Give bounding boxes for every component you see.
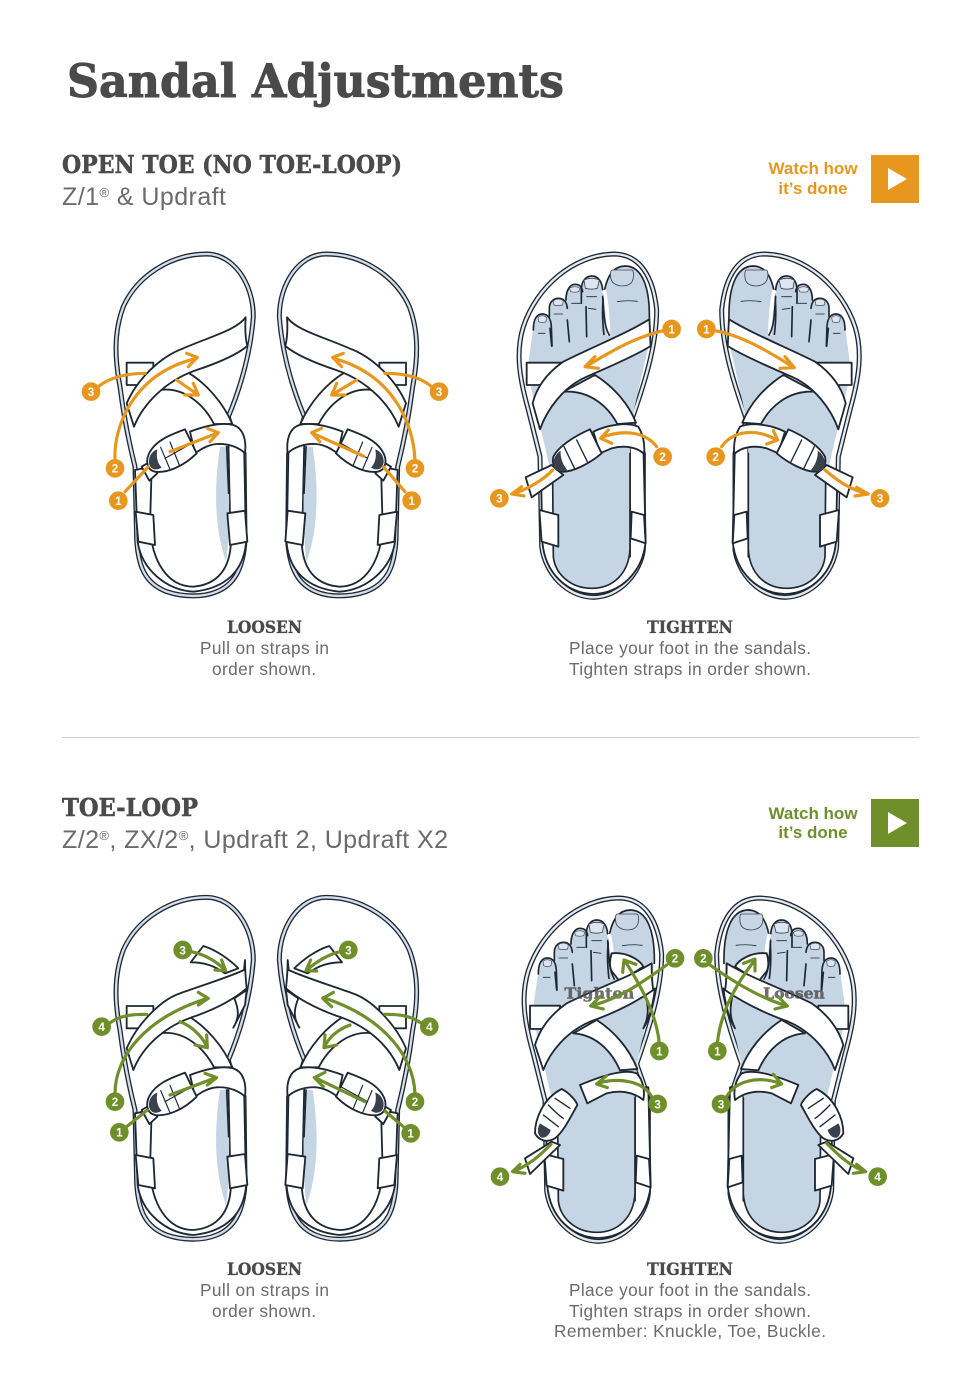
subheading: toe-loop models: ® — [99, 828, 109, 843]
arrows: left sandal: 3 — [179, 944, 186, 957]
caption: toe-loop loosen: LOOSEN — [227, 1260, 302, 1279]
arrows: right sandal: 1 — [408, 495, 415, 508]
arrows: right sandal: 3 — [436, 386, 443, 399]
arrows: right sandal: 2 — [412, 1096, 419, 1109]
caption: open toe tighten — [569, 618, 811, 679]
arrows: left sandal: 3 — [88, 386, 95, 399]
arrows: left foot: 3 — [654, 1098, 661, 1111]
subheading: open toe models: ® — [99, 185, 109, 200]
arrows: left foot: 1 — [656, 1045, 663, 1058]
panel: toe-loop loosen — [92, 897, 439, 1239]
subheading: open toe models: & Updraft — [109, 183, 226, 211]
right sandal — [279, 254, 417, 596]
caption: toe-loop loosen: Pull on straps in — [200, 1280, 329, 1300]
subheading: toe-loop models: Z/2 — [62, 826, 99, 854]
arrows: right sandal: 2 — [412, 463, 419, 476]
right sandal — [279, 897, 417, 1239]
watch link: open toe — [768, 155, 919, 203]
arrows: left sandal: 2 — [112, 1096, 119, 1109]
panel: open toe tighten — [490, 254, 889, 597]
caption: open toe loosen: Pull on straps in — [200, 638, 329, 658]
watch link: toe-loop — [768, 799, 919, 847]
arrows: left sandal: 4 — [98, 1021, 105, 1034]
caption: toe-loop tighten: Tighten straps in order shown. — [569, 1301, 811, 1321]
arrows: right foot — [694, 949, 887, 1186]
subheading: toe-loop models: ® — [179, 828, 189, 843]
arrows: right foot: 4 — [874, 1171, 881, 1184]
arrows: left foot — [491, 949, 684, 1186]
arrows: right foot: 3 — [877, 493, 884, 506]
left sandal — [116, 254, 253, 596]
arrows: left foot: 2 — [659, 451, 666, 464]
arrows: right foot: 1 — [703, 323, 710, 336]
caption: toe-loop tighten: Place your foot in the sandals. — [569, 1280, 811, 1300]
caption: toe-loop tighten: Remember: Knuckle, Toe, Buckle. — [554, 1321, 826, 1341]
watch link: open toe: Watch how — [768, 159, 858, 178]
arrows: left foot — [490, 320, 681, 508]
arrows: right sandal — [312, 353, 448, 510]
left foot in sandal — [519, 254, 657, 597]
caption: open toe tighten: TIGHTEN — [647, 618, 733, 637]
right foot in sandal — [717, 898, 854, 1241]
panel: toe-loop tighten — [491, 898, 887, 1241]
subheading: toe-loop models: , ZX/2 — [109, 826, 178, 854]
arrows: right foot: 2 — [712, 451, 719, 464]
arrows: right foot — [697, 320, 889, 508]
heading: open toe: OPEN TOE (NO TOE-LOOP) — [62, 150, 402, 179]
watch link: open toe: it’s done — [778, 179, 848, 198]
right foot in sandal — [722, 254, 859, 597]
arrows: right sandal: 4 — [426, 1021, 433, 1034]
panel: open toe loosen — [82, 254, 448, 596]
heading: toe-loop: TOE-LOOP — [62, 793, 198, 822]
caption: open toe tighten: Tighten straps in order shown. — [569, 659, 811, 679]
arrows: right sandal: 3 — [345, 944, 352, 957]
arrows: left sandal: 1 — [116, 1127, 123, 1140]
arrows: left sandal: 2 — [112, 463, 119, 476]
arrows: left foot: 3 — [496, 493, 503, 506]
subheading: toe-loop models: , Updraft 2, Updraft X2 — [189, 826, 448, 854]
arrows: right sandal: 1 — [407, 1128, 414, 1141]
arrows: right sandal — [306, 941, 439, 1143]
caption: open toe loosen: LOOSEN — [227, 618, 302, 637]
left foot in sandal — [524, 898, 662, 1241]
arrows: left sandal — [82, 353, 218, 510]
title: Sandal Adjustments — [67, 54, 564, 108]
left sandal — [116, 897, 253, 1239]
arrows: right foot: 1 — [714, 1045, 721, 1058]
arrows: left foot: 4 — [497, 1171, 504, 1184]
watch link: toe-loop: Watch how — [768, 804, 858, 823]
arrows: left foot: 2 — [672, 953, 679, 966]
caption: open toe tighten: Place your foot in the sandals. — [569, 638, 811, 658]
caption: toe-loop loosen — [200, 1260, 329, 1321]
stray label: Tighten: Tighten — [564, 985, 635, 1002]
caption: toe-loop loosen: order shown. — [212, 1301, 316, 1321]
arrows: right foot: 2 — [700, 953, 707, 966]
subheading: open toe models: Z/1 — [62, 183, 99, 211]
stray label: Loosen: Loosen — [763, 985, 825, 1002]
arrows: left sandal: 1 — [115, 495, 122, 508]
arrows: right foot: 3 — [718, 1098, 725, 1111]
caption: toe-loop tighten — [554, 1260, 826, 1341]
caption: open toe loosen: order shown. — [212, 659, 316, 679]
arrows: left sandal — [92, 941, 226, 1142]
watch link: toe-loop: it’s done — [778, 823, 848, 842]
caption: toe-loop tighten: TIGHTEN — [647, 1260, 733, 1279]
caption: open toe loosen — [200, 618, 329, 679]
arrows: left foot: 1 — [668, 323, 675, 336]
